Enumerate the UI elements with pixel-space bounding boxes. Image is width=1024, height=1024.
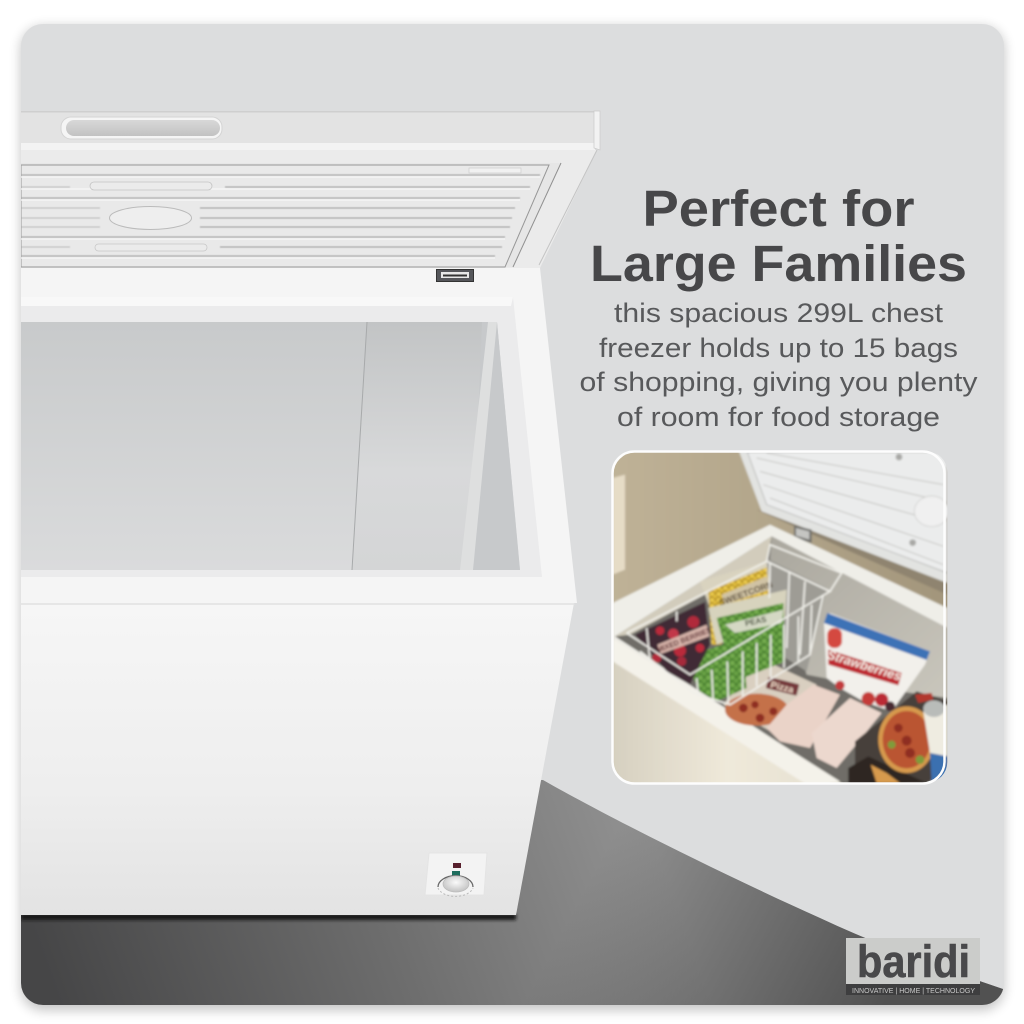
description text: this spacious 299L chest xyxy=(614,298,944,328)
peas bags xyxy=(684,590,787,701)
lid label xyxy=(469,168,521,173)
chest front wall xyxy=(614,662,842,782)
photo: freezer filled with food xyxy=(610,448,950,788)
description text xyxy=(580,298,978,432)
freezer xyxy=(21,111,600,920)
lid xyxy=(21,111,600,268)
control panel xyxy=(425,853,487,896)
title: Perfect for xyxy=(642,180,915,237)
open lid photo xyxy=(738,450,949,583)
hinge xyxy=(436,270,474,282)
floor xyxy=(21,780,1006,1006)
pizza box in chest xyxy=(723,661,817,735)
wire basket xyxy=(627,545,842,705)
mixed berries bag: MIXED BERRIES xyxy=(655,625,713,654)
chest rim and interior xyxy=(614,524,948,734)
freezer top rim xyxy=(21,268,577,603)
description text: of room for food storage xyxy=(617,402,940,432)
lid recess: bottom pill xyxy=(95,244,207,251)
freezer shadow on floor xyxy=(21,914,516,920)
strawberries bag xyxy=(824,613,930,711)
mixed berries bag xyxy=(635,602,713,685)
sweetcorn bag xyxy=(700,561,774,645)
lid handle xyxy=(61,117,222,139)
title: Large Families xyxy=(590,235,967,292)
sweetcorn bag: SWEETCORN xyxy=(718,579,774,608)
lid recess: top pill xyxy=(90,182,212,190)
freezer interior xyxy=(21,322,520,570)
chicken packs xyxy=(767,685,882,768)
logo: INNOVATIVE | HOME | TECHNOLOGY xyxy=(852,988,975,995)
freezer body xyxy=(21,603,574,915)
photo: freezer filled with food: Pizza xyxy=(770,680,795,695)
pizza box and pizza xyxy=(848,691,947,785)
peas bags: PEAS xyxy=(744,615,768,628)
lid recess: centre oval xyxy=(110,206,192,230)
logo: baridi xyxy=(857,936,970,987)
strawberries bag: Strawberries xyxy=(825,648,903,684)
title xyxy=(590,180,967,292)
room wall xyxy=(610,448,950,788)
description text: of shopping, giving you plenty xyxy=(580,367,978,397)
description text: freezer holds up to 15 bags xyxy=(599,333,958,363)
photo frame xyxy=(612,452,944,784)
ice cream tub xyxy=(923,700,947,783)
lid ventilation ribs xyxy=(21,175,540,256)
